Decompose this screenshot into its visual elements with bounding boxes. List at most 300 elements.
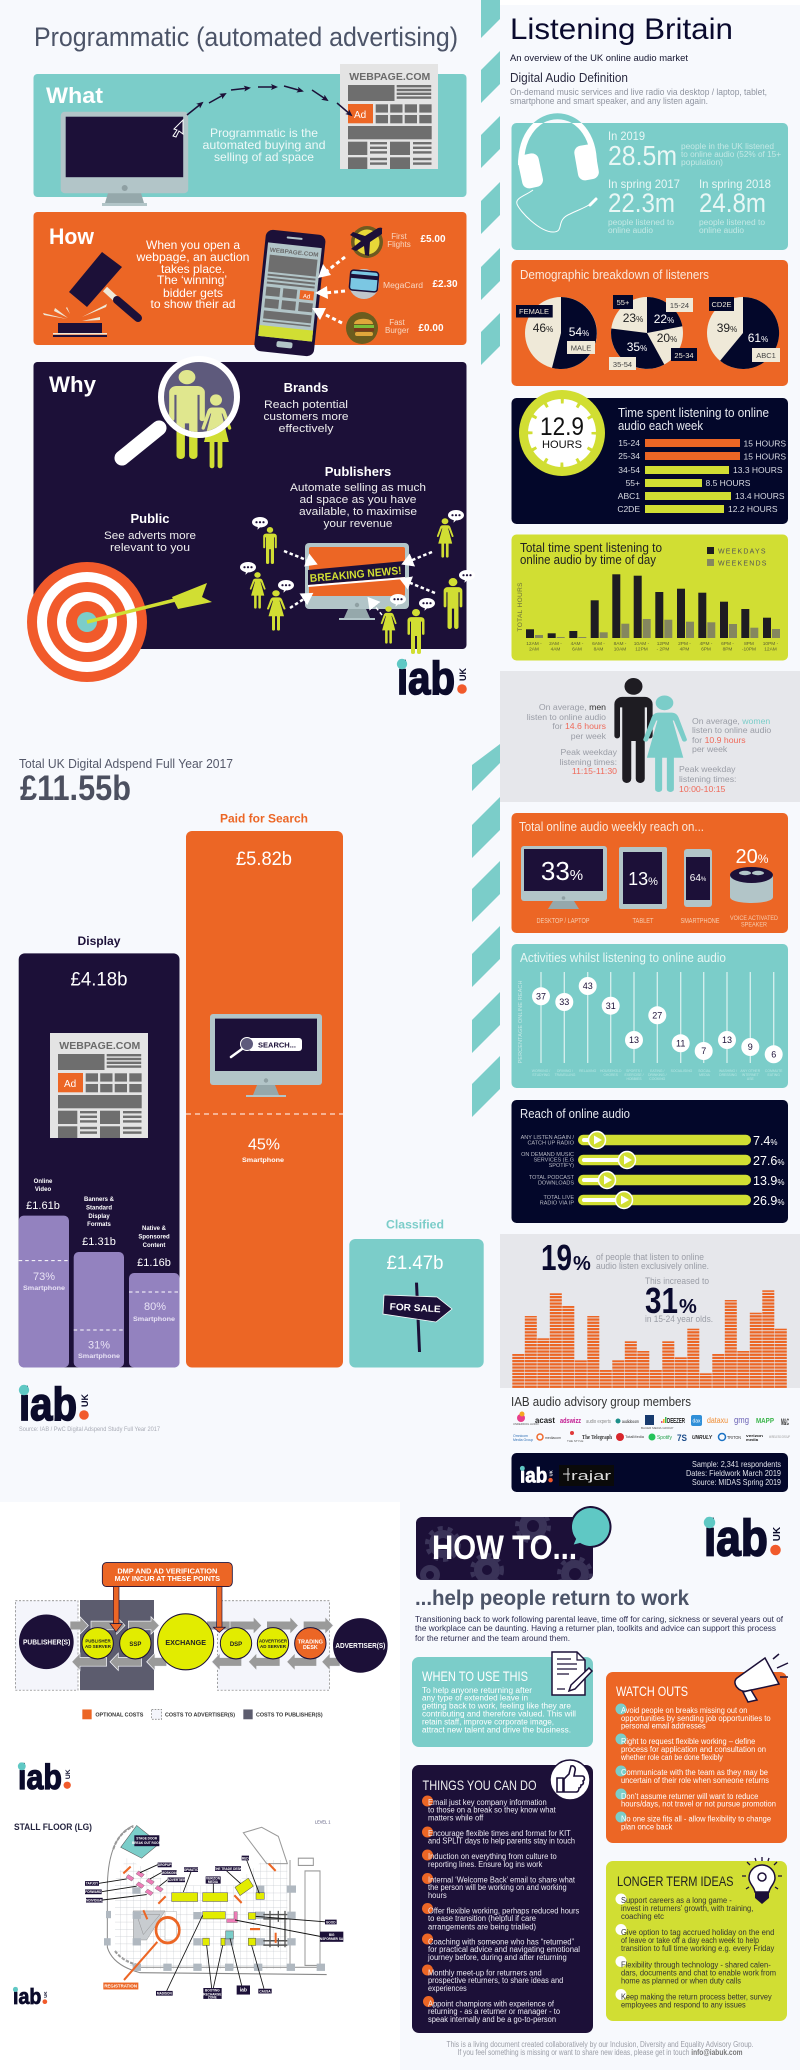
sub bar: native: Content	[143, 1243, 165, 1249]
text: Encourage flexible times and format for KIT	[428, 1829, 571, 1838]
stand labels: BREAK OUT ROOM	[132, 1841, 162, 1845]
stat: spring 2018: 24.8m	[699, 188, 766, 218]
logos: advisory group row two	[513, 1431, 790, 1443]
logo: iab UK top section: iab	[397, 652, 455, 704]
text: Communicate with the team as they may be	[621, 1768, 769, 1777]
axis label: TOTAL HOURS	[517, 582, 524, 632]
nodes	[19, 1614, 388, 1673]
sub bar: banners: Standard	[86, 1206, 112, 1212]
text: uncertain of their role when someone returns	[621, 1776, 769, 1785]
text: Publishers: Automate selling as much	[290, 482, 426, 494]
stand labels: MADISON	[157, 1991, 172, 1996]
heading: time of day	[520, 541, 662, 567]
text: sample details: Dates: Fieldwork March 2019	[686, 1468, 781, 1478]
text: Avoid people on breaks missing out on	[621, 1706, 747, 1715]
text: arrangements are being trialled)	[428, 1922, 536, 1931]
chart: listening by hour: 10AM	[614, 646, 626, 652]
icon: light bulb	[742, 1857, 782, 1904]
chart bar: Display	[19, 936, 180, 1368]
logos: advisory group row one: MAPP	[756, 1418, 774, 1425]
icon: auction gavel	[43, 252, 138, 337]
stat: 2019: people in the UK listened	[681, 142, 774, 151]
text: home as planned or when duty calls	[621, 1976, 741, 1985]
stat: 19%: of people that listen to online	[596, 1252, 704, 1262]
device: tablet: TABLET	[632, 918, 654, 925]
heading: How: How	[49, 224, 95, 249]
chart: activity sliders: 27	[652, 1010, 662, 1020]
chart: listening by hour: 10PM -	[763, 641, 779, 647]
panel: How	[34, 212, 466, 357]
stat: 19%: 19	[541, 1237, 572, 1278]
device: voice speaker: SPEAKER	[741, 922, 767, 928]
stat: 31%: in 15-24 year olds.	[645, 1314, 713, 1324]
heading: THINGS YOU CAN DO	[422, 1777, 537, 1793]
chart: reach sliders	[521, 1132, 784, 1208]
chart: gender pie	[516, 297, 597, 369]
stat: 2019: population)	[681, 158, 723, 167]
logos: advisory group row two: Media Group	[513, 1438, 533, 1442]
logos: advisory group row two: UNRULY	[692, 1435, 713, 1441]
icon: MegaCard	[349, 269, 379, 299]
text: for practical advice and navigating emotional	[428, 1945, 580, 1954]
chart: activity sliders: 31	[606, 1001, 616, 1011]
stat: 2019: In 2019	[608, 129, 645, 143]
logos: advisory group row two: mediacom	[545, 1436, 561, 1440]
bullets	[616, 1894, 626, 2000]
legend: costs: COSTS TO ADVERTISER(S)	[165, 1712, 235, 1718]
logo: iab UK adspend: iab	[19, 1378, 77, 1430]
chart: listening by hour: 6PM -	[721, 641, 734, 647]
icon: smartphone showing webpage: WEBPAGE.COM	[269, 248, 319, 259]
stand labels: DROPUP	[158, 1863, 172, 1867]
sub bar: native: 80%	[144, 1301, 166, 1313]
chart: activity sliders: 33	[559, 997, 569, 1007]
axis label: PERCENTAGE ONLINE REACH	[518, 980, 524, 1064]
text: Offer flexible working, perhaps reduced hours	[428, 1906, 579, 1915]
chart: activity sliders: 6	[771, 1050, 776, 1060]
logos: advisory group row two: media	[746, 1437, 759, 1442]
icon: smartphone showing webpage	[254, 229, 326, 357]
device: smartphone: SMARTPHONE	[680, 918, 720, 925]
logo: iab UK bottom left: iab	[13, 1984, 41, 2009]
nodes: DSP	[230, 1641, 242, 1648]
text: experiences	[428, 1984, 467, 1993]
heading: time of day: online audio by time of day	[520, 553, 657, 567]
heading: total adspend: Total UK Digital Adspend Full Year 2017	[19, 757, 233, 771]
chart: activity sliders: SOCIAL	[698, 1069, 711, 1073]
orange arrows on map	[123, 1864, 276, 1943]
chart: listening by hour: 12PM	[635, 646, 648, 652]
legend: costs: OPTIONAL COSTS	[95, 1712, 144, 1718]
text: Brands	[264, 380, 348, 435]
chart: listening by hour: 8PM	[744, 641, 754, 647]
chart: hours by group: 15-24	[618, 438, 640, 448]
sub bar: banners	[74, 1197, 124, 1368]
panel: demographic breakdown	[512, 260, 788, 386]
chart: age pie: 23%	[623, 311, 643, 325]
text: what description	[202, 126, 326, 164]
chart: age pie: 15-24	[670, 301, 689, 310]
text: Publishers: ad space as you have	[300, 494, 416, 506]
stand labels: INDIVIDUAL	[85, 1898, 103, 1903]
icon: breaking news monitor: BREAKING NEWS!	[309, 565, 402, 585]
text: intro paragraph: Transitioning back to work following parental leave, time off for caring, sickness or several years out of	[415, 1615, 784, 1624]
sub bar: online video: 73%	[33, 1271, 55, 1283]
chart: activity sliders: 43	[583, 981, 593, 991]
text: to those on a break so they know what	[428, 1806, 556, 1815]
icon: for sale sign: FOR SALE	[389, 1302, 441, 1315]
stand labels: BOOTING	[205, 1989, 220, 1993]
callout: DMP and ad verification: MAY INCUR AT THESE POINTS	[115, 1574, 220, 1583]
text: speak internally and be a go-to-person	[428, 2015, 556, 2024]
text: how description: The ‘winning’	[157, 273, 227, 287]
logo: rajar	[559, 1465, 614, 1486]
chart: activity sliders: HOUSEHOLD	[600, 1069, 622, 1073]
text: Brands: effectively	[278, 423, 334, 435]
logos: advisory group row one: gmg	[734, 1415, 749, 1425]
chart: age pie: 35%	[627, 340, 647, 354]
stat: 2019: 28.5m	[608, 140, 677, 171]
chart: age pie: 25-34	[674, 351, 694, 360]
logos: advisory group row one: audioboom	[622, 1419, 639, 1424]
chart: listening by hour: 6AM -	[592, 641, 605, 647]
device: desktop: 33%	[541, 856, 583, 886]
text: any type of extended leave in	[422, 1694, 528, 1702]
chart: social grade pie: ABC1	[756, 351, 776, 360]
panel: reach of online audio	[512, 1100, 788, 1223]
chart: activity sliders: 7	[701, 1046, 706, 1056]
text: what description: selling of ad space	[214, 150, 314, 164]
text: contributing and therefore valued. This will	[422, 1710, 576, 1718]
icon: breaking news monitor	[305, 543, 409, 620]
text: women average: On average, women	[692, 716, 770, 726]
heading: reach: Reach of online audio	[520, 1107, 630, 1121]
text: what description: automated buying and	[202, 138, 326, 152]
icon: woman	[643, 695, 687, 792]
arrowheads: bids	[312, 264, 331, 320]
icon: magnifying glass over people	[122, 359, 237, 468]
text: intro paragraph: for the returner and the team around them.	[415, 1634, 570, 1643]
chart: age pie	[609, 295, 697, 370]
text: Appoint champions with experience of	[428, 1999, 555, 2008]
sub bar: banners: Banners &	[84, 1197, 115, 1203]
arrows: flow	[70, 1617, 340, 1671]
chart: listening by hour: 8PM	[723, 646, 732, 652]
chart: social grade pie: 39%	[717, 321, 737, 335]
chart: age pie: 55+	[617, 298, 630, 307]
device: voice speaker	[730, 846, 778, 928]
chart: listening by hour: -10PM	[742, 646, 756, 652]
chart: listening by hour: 4PM	[680, 646, 689, 652]
logo: iab UK top section: UK	[458, 668, 468, 681]
icon: smartphone showing webpage: Ad	[303, 294, 311, 301]
chart: activity sliders: DRIVING /	[557, 1069, 573, 1073]
text: Publishers: Publishers	[325, 464, 391, 479]
stand labels: MEDIA	[208, 1880, 219, 1884]
nodes: AD SERVER	[260, 1644, 287, 1649]
chart: activity sliders: 13	[629, 1035, 639, 1045]
sub bar: native: Smartphone	[133, 1317, 176, 1323]
logos: advisory group row two: WIRELESS GROUP	[769, 1435, 790, 1439]
chart: listening by hour	[526, 574, 780, 652]
text: women average: listening times:	[679, 774, 736, 784]
text: invest in returners’ growth, with training,	[621, 1904, 753, 1913]
chart: listening by hour: 8AM	[594, 646, 603, 652]
text: Give option to tag accrued holiday on the end	[621, 1928, 774, 1937]
stat: 31%	[645, 1276, 713, 1324]
text: sample details: Sample: 2,341 respondents	[692, 1459, 781, 1469]
text	[427, 1798, 580, 2024]
chart bar: Display: £4.18b	[70, 970, 128, 990]
heading: What: What	[46, 83, 104, 108]
text: Monthly meet-up for returners and	[428, 1968, 542, 1977]
stat: 19%: %	[573, 1253, 591, 1275]
chart: age pie: 20%	[657, 331, 677, 345]
text: bidder prices: MegaCard	[383, 281, 423, 290]
chart: hours by group: 25-34	[618, 451, 640, 461]
chart: activity sliders: HOBBIES	[626, 1077, 642, 1081]
chart: listening by hour: 10AM -	[634, 641, 650, 647]
icon: target with arrow	[27, 562, 212, 682]
device: tablet: 13%	[628, 869, 658, 889]
stand labels: BIG	[329, 1933, 335, 1937]
heading: time spent	[618, 406, 769, 433]
text: Public	[104, 511, 196, 554]
text: subtitle: An overview of the UK online audio market	[510, 53, 688, 64]
chart: gender pie: MALE	[571, 344, 591, 352]
legend: weekdays weekends: WEEKDAYS	[718, 548, 767, 556]
icon: webpage with ad: Ad	[354, 110, 366, 121]
registration marker: REGISTRATION	[104, 1983, 137, 1989]
text: intro paragraph	[415, 1615, 784, 1643]
chart: hours by group: ABC1	[618, 491, 640, 501]
stand labels: TAPJOY	[86, 1882, 99, 1886]
nodes: EXCHANGE	[165, 1638, 206, 1647]
stat: spring 2017: online audio	[608, 226, 654, 235]
text: of leave or take off a day each week to help	[621, 1936, 759, 1945]
text: dars, documents and chat to enable work from	[621, 1968, 776, 1977]
text: definition	[510, 87, 767, 106]
text: Don’t assume returner will want to reduce	[621, 1792, 759, 1801]
panel: What	[34, 64, 466, 206]
text	[620, 1706, 776, 1832]
text: To help anyone returning after	[422, 1686, 532, 1695]
heading: activities: Activities whilst listening to online audio	[520, 951, 726, 965]
text: what description: Programmatic is the	[210, 126, 318, 140]
device: smartphone: 64%	[690, 873, 707, 884]
logo: iab UK adspend: UK	[80, 1394, 90, 1407]
legend: weekdays weekends: WEEKENDS	[718, 560, 768, 568]
logos: advisory group row two: Omnicom	[513, 1434, 528, 1438]
text: Brands: Reach potential	[264, 399, 348, 411]
stand labels: STAGE DOOR	[136, 1837, 158, 1841]
leader lines	[99, 1860, 325, 1991]
chart: age pie: 22%	[654, 312, 674, 326]
text: the person will be working on and working	[428, 1883, 567, 1892]
icon: clock 12.9 hours: HOURS	[542, 439, 582, 451]
chart bar: Paid for Search: £5.82b	[236, 849, 292, 870]
chart: hours by group: 13.4 HOURS	[735, 491, 785, 501]
chart: reach sliders: 27.6%	[753, 1154, 784, 1168]
text: Publishers: available, to maximise	[299, 506, 417, 518]
stat: 2019: to online audio (52% of 15+	[681, 150, 781, 159]
logos: advisory group row one: dax	[692, 1418, 701, 1424]
panel: Why	[27, 359, 475, 682]
bullets	[422, 1796, 434, 2007]
stat: spring 2018	[699, 177, 771, 235]
panel: weekly reach by device	[512, 813, 788, 933]
panel: listener numbers	[512, 116, 788, 250]
nodes: ADVERTISER	[259, 1638, 288, 1644]
chart bar: Classified: £1.47b	[386, 1253, 444, 1274]
stand labels	[85, 1819, 350, 2000]
text: Brands: Brands	[284, 380, 328, 395]
sub bar: banners: Formats	[87, 1222, 111, 1228]
logos: advisory group row one: adswizz	[560, 1416, 581, 1425]
stands: pink	[126, 1871, 237, 1923]
text: intro paragraph: the workplace can be daunting. Having a returner plan, toolkits and advice can support this process	[415, 1624, 776, 1633]
heading: WATCH OUTS	[616, 1683, 688, 1699]
device: smartphone	[680, 849, 720, 925]
chart: listening by hour: 8AM -	[614, 641, 627, 647]
chart: reach sliders: 13.9%	[753, 1174, 784, 1188]
chart: activity sliders: INTERNET	[742, 1073, 759, 1077]
chart: listening by hour: 6AM	[572, 646, 582, 652]
chart: reach sliders: 26.9%	[753, 1194, 784, 1208]
logo: iab UK lower left: iab	[18, 1758, 62, 1797]
text: Induction on everything from culture to	[428, 1852, 557, 1861]
panel: things you can do	[412, 1760, 593, 2033]
text: returning - as a returner or manager - to	[428, 2007, 561, 2016]
icon: man	[614, 678, 653, 783]
white strip top right	[500, 0, 800, 5]
chart: activity sliders: TRAVELLING	[555, 1073, 576, 1077]
icon: webpage	[50, 1033, 148, 1138]
chart bar: Display: Display	[78, 936, 121, 948]
text: reporting lines. Ensure log ins work	[428, 1860, 543, 1869]
panel: when to use this	[412, 1652, 593, 1747]
chart: activity sliders	[532, 972, 783, 1081]
chart: hours by group	[617, 438, 786, 514]
heading: advisory group: IAB audio advisory group members	[511, 1394, 691, 1409]
text: adspend source: Source: IAB / PwC Digital Adspend Study Full Year 2017	[19, 1427, 161, 1433]
floor grid and walls	[107, 1825, 327, 1975]
text: prospective returners, to share ideas and	[428, 1976, 563, 1985]
chart bar: Paid for Search: Smartphone	[242, 1157, 284, 1164]
text: Brands: customers more	[264, 411, 348, 423]
chart: activity sliders: RELAXING	[579, 1069, 597, 1073]
logo: iab UK how to: UK	[772, 1526, 783, 1541]
icon: webpage with ad: WEBPAGE.COM	[349, 72, 430, 83]
chart: listening by hour: 2AM	[529, 646, 539, 652]
text: how description: takes place.	[161, 262, 225, 276]
chart: listening by hour: 2PM -	[678, 641, 691, 647]
text	[621, 1896, 776, 2010]
icons: speech bubbles	[240, 510, 475, 611]
panel: longer term ideas	[606, 1857, 787, 2021]
nodes: ADVERTISER(S)	[335, 1641, 386, 1650]
text: how description	[135, 238, 250, 311]
logo: iab UK how to: iab	[704, 1510, 768, 1566]
chart: reach sliders: RADIO VIA IP	[540, 1200, 574, 1206]
chart: activity sliders: COOKING	[649, 1077, 666, 1081]
text: Email just key company information	[428, 1798, 547, 1807]
text: Public: Public	[130, 511, 170, 526]
people: audience figures	[250, 518, 462, 654]
text: opportunities by sending job opportunities to	[621, 1714, 771, 1723]
chart: reach sliders: ANY LISTEN AGAIN /	[521, 1135, 574, 1141]
sub bar: native	[129, 1226, 180, 1368]
heading: total adspend: £11.55b	[20, 769, 131, 808]
text: retain staff, improve corporate image,	[422, 1718, 554, 1726]
chart: activity sliders: STUDYING	[532, 1073, 550, 1077]
stand labels: CAUSA	[259, 1989, 271, 1993]
heading: Digital Audio Definition: Digital Audio Definition	[510, 71, 628, 85]
chart: hours by group: 55+	[626, 478, 640, 488]
chart: hours by group: 34-54	[618, 465, 640, 475]
stat: spring 2017: people listened to	[608, 218, 675, 227]
chart: activity sliders: SOCIALISING	[671, 1069, 693, 1073]
callout: DMP and ad verification	[102, 1563, 232, 1632]
text: to ease transition (helpful if care	[428, 1914, 537, 1923]
chart: listening by hour: 4AM -	[571, 641, 584, 647]
text: Right to request flexible working – define	[621, 1737, 756, 1746]
stat: spring 2018: people listened to	[699, 218, 766, 227]
heading: time of day: Total time spent listening to	[520, 541, 662, 555]
chart: activity sliders: EATING	[768, 1073, 780, 1077]
grey structural blocks	[104, 1885, 325, 1971]
icon: search monitor: SEARCH...	[258, 1042, 296, 1050]
text: Support careers as a long game -	[621, 1896, 732, 1905]
text: attract new talent and drive the business.	[422, 1726, 571, 1734]
banner: how to	[416, 1506, 612, 1580]
nodes: SSP	[129, 1641, 141, 1648]
stat: 2019	[608, 129, 781, 171]
stands: yellow	[172, 1878, 264, 1945]
panel: men and women listening	[500, 671, 800, 802]
text: men average: Peak weekday	[560, 747, 618, 757]
stands: teal	[121, 1825, 233, 1939]
nodes: TRADING	[298, 1639, 323, 1645]
logos: advisory group row one: acast	[535, 1416, 555, 1425]
stand labels: RED	[242, 1856, 249, 1860]
dark rails	[263, 1911, 287, 1947]
stand labels: ADVERTIER	[167, 1878, 186, 1882]
chart: activity sliders: COMMUTE	[765, 1069, 783, 1073]
chart: gender pie: FEMALE	[519, 307, 549, 316]
logos: advisory group row one: DEEZER	[667, 1418, 685, 1425]
chart: activity sliders: 37	[536, 992, 546, 1002]
text: men average: per week	[571, 731, 607, 741]
nodes: DESK	[303, 1645, 318, 1651]
text: sample details: Source: MIDAS Spring 2019	[692, 1477, 781, 1487]
logos: advisory group row two: verizon	[746, 1433, 764, 1438]
panel: exclusively online	[500, 1234, 800, 1388]
sub bar: online video	[19, 1179, 69, 1368]
text: bidder prices: £0.00	[418, 323, 444, 334]
heading: Listening Britain: Listening Britain	[510, 13, 733, 46]
icon: Fast Burger	[346, 312, 378, 344]
text: bidder prices: First	[391, 232, 408, 241]
icon: search monitor	[210, 1014, 322, 1097]
device: voice speaker: 20%	[736, 846, 769, 868]
stand labels: TRANSFORMER SALON	[313, 1937, 350, 1941]
text: hours/days, not travel or not pursue promotion	[621, 1800, 776, 1808]
text: men average: 11:15-11:30	[572, 766, 617, 776]
stat: 19%	[541, 1237, 709, 1278]
chart: listening by hour: 12PM	[657, 641, 669, 647]
nodes: AD SERVER	[85, 1644, 112, 1649]
